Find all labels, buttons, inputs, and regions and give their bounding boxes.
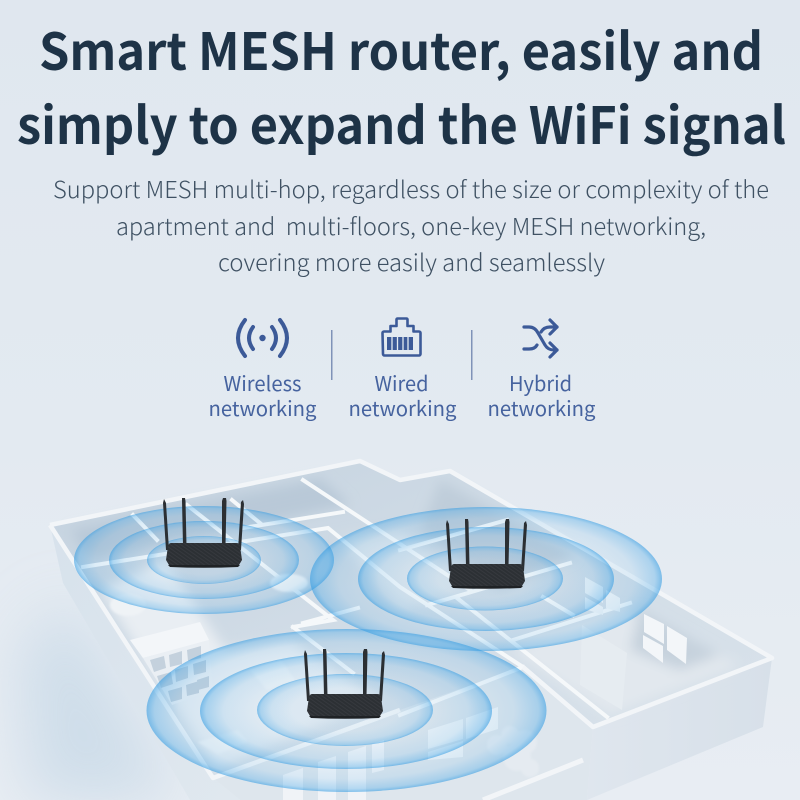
window: upper room	[585, 577, 620, 615]
interior partition	[580, 625, 627, 710]
building shadow	[20, 600, 180, 800]
left outer wall	[50, 525, 240, 800]
label: wired networking	[348, 367, 457, 422]
right outer wall	[587, 658, 772, 800]
interior walls	[83, 480, 630, 717]
window: lower room	[428, 707, 498, 760]
title	[17, 11, 786, 159]
label: hybrid networking: networking	[488, 392, 596, 422]
label: wired networking: networking	[348, 392, 457, 422]
networking modes row	[208, 318, 596, 422]
signal waves: router 1	[74, 506, 334, 614]
label: wired networking: Wired	[374, 367, 428, 397]
label: wireless networking: Wireless	[224, 367, 302, 397]
outer wall tops	[50, 461, 772, 778]
mode: wired networking	[348, 318, 457, 422]
title: simply to expand the WiFi signal	[17, 85, 786, 159]
window: far right room	[643, 614, 687, 664]
description text: covering more easily and seamlessly	[218, 244, 605, 278]
front lower wall	[213, 667, 593, 800]
description text: Support MESH multi-hop, regardless of the size or complexity of the	[53, 171, 769, 205]
lower terrace wall	[483, 760, 583, 800]
mode: hybrid networking	[488, 320, 596, 422]
floor surface	[50, 461, 772, 778]
bookshelf	[130, 622, 213, 705]
label: hybrid networking: Hybrid	[509, 367, 572, 397]
description text	[53, 171, 769, 278]
icon: ethernet port	[382, 318, 420, 356]
description text: apartment and multi-floors, one-key MESH networking,	[116, 208, 706, 242]
mode: wireless networking	[208, 320, 317, 422]
plant	[487, 726, 539, 777]
router 2	[446, 519, 527, 589]
router 3	[304, 649, 385, 719]
label: wireless networking: networking	[208, 392, 317, 422]
signal waves: router 2	[310, 507, 662, 651]
icon: wireless signal	[238, 320, 287, 356]
front windows	[283, 740, 384, 800]
label: wireless networking	[208, 367, 317, 422]
title: Smart MESH router, easily and	[39, 11, 763, 85]
bed pillows	[110, 574, 308, 754]
label: hybrid networking	[488, 367, 596, 422]
icon: shuffle arrows	[524, 320, 557, 357]
floor plan building	[50, 461, 772, 800]
room shading	[70, 478, 740, 770]
signal waves: router 3	[146, 629, 546, 792]
router 1	[163, 498, 244, 568]
